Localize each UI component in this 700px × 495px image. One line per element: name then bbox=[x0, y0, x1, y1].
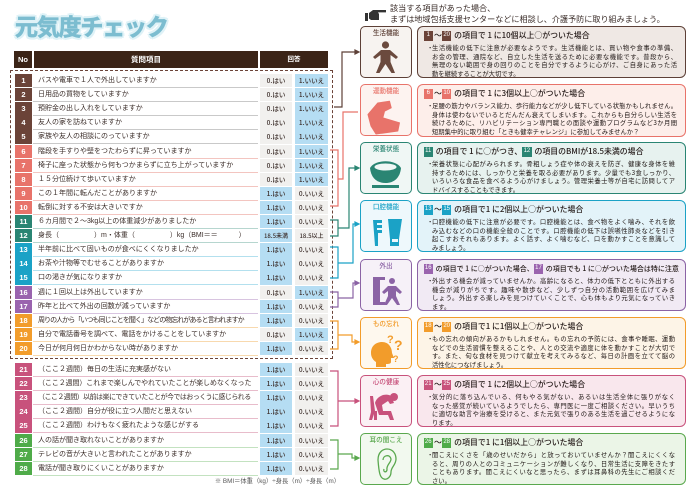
row 9: この１年間に転んだことがありますか bbox=[38, 190, 157, 197]
row 16: 0.はい bbox=[267, 286, 285, 296]
panel: mental health: に適切な助言や治療を受けると、また元気で張りのある生活を過ごせるようにな bbox=[432, 409, 675, 418]
row 22 bbox=[15, 377, 328, 391]
row 7: 0.はい bbox=[267, 160, 285, 170]
panel: hearing: ると、周りの人とのコミュニケーションが難しくなり、日常生活に支障をきたす bbox=[432, 459, 675, 468]
row 27: 0.いいえ bbox=[299, 449, 324, 459]
table header: No: No bbox=[18, 55, 28, 64]
category: motor function bbox=[360, 84, 412, 136]
panel: mental health: ・ bbox=[427, 392, 433, 401]
intro text: まずは地域包括支援センターなどに相談し、介護予防に取り組みましょう。 bbox=[390, 15, 665, 24]
connector: oral function bbox=[330, 222, 359, 278]
row 14: 14 bbox=[19, 259, 28, 268]
panel: motor function: 6 bbox=[427, 90, 430, 96]
row 4: 0.はい bbox=[267, 117, 285, 127]
row 16: 16 bbox=[19, 288, 28, 296]
row 22: 1.はい bbox=[267, 378, 285, 388]
row 8: １５分位続けて歩いていますか bbox=[38, 176, 136, 183]
row 3: 0.はい bbox=[267, 103, 285, 113]
row 8: 8 bbox=[21, 175, 26, 184]
row 26: 1.はい bbox=[267, 434, 285, 444]
row 14: 0.いいえ bbox=[299, 258, 324, 268]
panel: oral function: ・ bbox=[427, 217, 433, 226]
connector: nutrition bbox=[330, 166, 359, 236]
row 17: 昨年と比べて外出の回数が減っていますか bbox=[38, 303, 170, 310]
row 11: ６カ月間で２～3kg以上の体重減少がありましたか bbox=[38, 218, 196, 225]
row 22: （ここ２週間）これまで楽しんでやれていたことが楽しめなくなった bbox=[38, 380, 251, 387]
row 1: 1 bbox=[21, 76, 26, 85]
panel: life function bbox=[417, 26, 686, 78]
row 19: 1.いいえ bbox=[299, 329, 324, 339]
row 2 bbox=[15, 88, 328, 102]
panel: oral function: 起こすおそれもあります。よく話す、よく噛むなど、口を動かすことを意識して bbox=[432, 234, 675, 243]
row 26: 0.いいえ bbox=[299, 434, 324, 444]
category: motor function: 運動機能 bbox=[373, 88, 399, 95]
panel: mental health: ります。 bbox=[432, 418, 457, 426]
row 26: 26 bbox=[19, 436, 28, 444]
panel: life function: 無理のない範囲で身の回りのことを自分でするように心がけ、ご自身にあった活 bbox=[432, 60, 677, 69]
row 21 bbox=[15, 363, 328, 377]
panel: life function: 20 bbox=[443, 32, 450, 38]
panel: hearing: さい。 bbox=[432, 476, 451, 484]
panel: nutrition: ・ bbox=[427, 159, 433, 168]
panel: nutrition: ドバイスすることもできます。 bbox=[432, 184, 519, 194]
row 10: 0.いいえ bbox=[299, 202, 324, 212]
row 19: 0.はい bbox=[267, 329, 285, 339]
panel: life function: 生活機能の低下に注意が必要なようです。生活機能とは、買い物や食事の準備、 bbox=[432, 43, 677, 52]
row 6: 6 bbox=[21, 146, 26, 156]
row 18: 0.いいえ bbox=[299, 315, 324, 325]
row 15: 15 bbox=[19, 273, 28, 282]
row 26 bbox=[15, 434, 328, 448]
row 13: 0.いいえ bbox=[299, 244, 324, 254]
panel: nutrition: の項目で 1 に○がつき、 の項目のBMIが18.5未満の場合 bbox=[436, 146, 643, 157]
dashed frame bbox=[10, 70, 333, 359]
row 6: 階段を手すりや壁をつたわらずに昇っていますか bbox=[38, 148, 192, 154]
row 7: 7 bbox=[21, 161, 26, 170]
category: hearing: 耳の聞こえ bbox=[370, 437, 402, 444]
row 15: 1.はい bbox=[267, 272, 285, 282]
panel: nutrition: 栄養状態に心配がみられます。骨粗しょう症や体の衰えを防ぎ、健康な身体を維 bbox=[432, 159, 675, 168]
row 18 bbox=[15, 314, 328, 328]
row 14: 1.はい bbox=[267, 258, 285, 268]
row 22: 22 bbox=[19, 379, 28, 388]
row 20: 20 bbox=[19, 344, 28, 353]
row 28 bbox=[15, 462, 328, 476]
row 5: 5 bbox=[21, 132, 26, 141]
category: nutrition bbox=[360, 142, 412, 194]
connector: motor function bbox=[330, 112, 358, 206]
row 23: 0.いいえ bbox=[299, 392, 324, 402]
row 14: お茶や汁物等でむせることがありますか bbox=[38, 260, 164, 267]
row 17: 0.いいえ bbox=[299, 301, 324, 311]
row 5: 家族や友人の相談にのっていますか bbox=[38, 133, 150, 140]
row 4 bbox=[15, 116, 328, 130]
row 23: 1.はい bbox=[267, 392, 285, 402]
row 15: 口の渇きが気になりますか bbox=[38, 274, 122, 281]
panel: life function: 1 bbox=[427, 32, 430, 38]
row 9 bbox=[15, 187, 328, 201]
row 22: 0.いいえ bbox=[299, 378, 324, 388]
category: mental health: 心の健康 bbox=[373, 379, 399, 386]
row 6: 0.はい bbox=[267, 146, 285, 156]
row 12: 18.5未満 bbox=[264, 231, 288, 240]
panel: hearing: 28 bbox=[443, 439, 450, 445]
row 25: 25 bbox=[19, 421, 28, 430]
icon: head with question marks bbox=[371, 334, 403, 367]
row 12: 身長（ ）m・体重（ ）kg（BMI＝＝ ） bbox=[38, 232, 246, 239]
panel: motor function: 足腰の筋力やバランス能力、歩行能力などが少し低下している状態かもしれません。 bbox=[432, 101, 677, 110]
row 9: 0.いいえ bbox=[299, 188, 324, 198]
row 3: 預貯金の出し入れをしていますか bbox=[38, 105, 143, 112]
category: oral function: 口腔機能 bbox=[373, 204, 399, 211]
panel: oral function: み込むなどの口の機能全般のことです。口腔機能の低下は誤嚥性肺炎などを引き bbox=[432, 226, 675, 235]
category: life function: 生活機能 bbox=[373, 30, 399, 37]
row 25 bbox=[15, 419, 328, 433]
panel: hearing: こともあります。聞こえにくいなと思ったら、まずは耳鼻科の先生にご相談くだ bbox=[432, 467, 675, 476]
row 12: 12 bbox=[19, 231, 28, 240]
panel: nutrition: 持するためには、しっかりと栄養を取る必要があります。少量でも3食しっかり、 bbox=[432, 168, 675, 177]
panel: motor function: 短期集中的に取り組む「ときも健幸チャレンジ」に参加してみませんか？ bbox=[432, 126, 639, 136]
panel: mental health: ～ の項目で 1 に2個以上○がついた場合 bbox=[434, 379, 585, 390]
row 11: 0.いいえ bbox=[299, 216, 324, 226]
row 8: 1.いいえ bbox=[299, 174, 324, 184]
panel: going out: 16 bbox=[425, 265, 432, 271]
row 4: 4 bbox=[21, 118, 26, 127]
row 23: 23 bbox=[19, 393, 28, 402]
category: life function bbox=[360, 26, 412, 78]
category: forgetfulness bbox=[360, 317, 412, 369]
row 24: 1.はい bbox=[267, 406, 285, 416]
row 16: 1.いいえ bbox=[299, 286, 324, 296]
row 3: 3 bbox=[21, 104, 26, 113]
panel: hearing: 聞こえにくさを「歳のせいだから」と放っておいていませんか？聞こえにくくな bbox=[432, 450, 675, 459]
panel: nutrition bbox=[417, 142, 686, 194]
panel: hearing: 26 bbox=[425, 439, 432, 445]
icon: person leaving door bbox=[373, 277, 402, 305]
panel: nutrition: 12 bbox=[524, 148, 530, 154]
row 5: 0.はい bbox=[267, 131, 285, 141]
panel: forgetfulness: す。また、旬な食材を見つけて献立を考えてみるなど、毎日の計画を立てて脳の bbox=[432, 351, 675, 360]
row 25: 0.いいえ bbox=[299, 420, 324, 430]
panel: nutrition: いろいろな食品を食べるよう心がけましょう。管理栄養士等が自宅に訪問してア bbox=[432, 176, 675, 185]
row 21: 21 bbox=[19, 365, 28, 374]
icon: walking person bbox=[373, 41, 398, 73]
panel: forgetfulness bbox=[417, 317, 686, 369]
row 9: 1.はい bbox=[267, 188, 285, 198]
row 4: 友人の家を訪ねていますか bbox=[38, 119, 122, 126]
panel: forgetfulness: ・ bbox=[427, 334, 433, 343]
row 2: 日用品の買物をしていますか bbox=[38, 91, 129, 98]
row 6: 1.いいえ bbox=[299, 146, 324, 156]
row 17 bbox=[15, 300, 328, 314]
panel: forgetfulness: 20 bbox=[443, 323, 450, 329]
panel: motor function: ・ bbox=[427, 101, 433, 110]
panel: oral function: 13 bbox=[425, 206, 432, 212]
BMI footnote: ※ BMI＝体重（kg）÷身長（m）÷身長（m） bbox=[215, 478, 340, 485]
panel: oral function: 15 bbox=[443, 206, 450, 212]
icon: ear bbox=[377, 448, 397, 480]
panel: motor function: 10 bbox=[443, 90, 450, 96]
row 9: 9 bbox=[21, 189, 26, 198]
row 1: バスや電車で１人で外出していますか bbox=[38, 77, 157, 84]
row 13: 13 bbox=[19, 245, 28, 254]
row 14 bbox=[15, 257, 328, 271]
row 27 bbox=[15, 448, 328, 462]
panel: going out: 外出する機会が減っていませんか。高齢になると、体力の低下とともに外出する bbox=[432, 276, 675, 285]
row 6 bbox=[15, 145, 328, 159]
panel: life function: 動を継続することが大切です。 bbox=[432, 68, 520, 78]
row 11 bbox=[15, 215, 328, 229]
panel: forgetfulness: 活性化につなげましょう。 bbox=[432, 360, 507, 368]
row 13: 半年前に比べて固いものが食べにくくなりましたか bbox=[38, 246, 199, 253]
panel: mental health: なった感覚が続いているようでしたら、専門医に一度ご相談ください。早いうち bbox=[432, 401, 675, 410]
row 18: 周りの人から「いつも同じことを聞く」などの物忘れがあると言われますか bbox=[38, 317, 244, 324]
table header: answer bbox=[260, 51, 328, 68]
icon: head with question marks: ? bbox=[394, 337, 403, 353]
category: oral function bbox=[360, 200, 412, 252]
row 15: 0.いいえ bbox=[299, 272, 324, 282]
row 5 bbox=[15, 130, 328, 144]
row 23 bbox=[15, 391, 328, 405]
table header: question: 質問項目 bbox=[131, 55, 161, 64]
row 1 bbox=[15, 74, 328, 88]
row 10: 転倒に対する不安は大きいですか bbox=[38, 204, 143, 211]
row 20: 今日が何月何日かわからない時がありますか bbox=[38, 345, 178, 352]
row 27: 27 bbox=[19, 450, 28, 459]
title: 元気度チェック bbox=[15, 8, 168, 42]
row 21: 1.はい bbox=[267, 364, 285, 374]
row 15 bbox=[15, 271, 328, 285]
row 10: 1.はい bbox=[267, 202, 285, 212]
panel: going out: しょう。外出する楽しみを見つけていくことで、心も体もより元気になっていき bbox=[432, 293, 675, 302]
panel: going out: 17 bbox=[535, 265, 542, 271]
intro text: 該当する項目があった場合、 bbox=[390, 4, 495, 13]
row 12 bbox=[15, 229, 328, 243]
row 28: 0.いいえ bbox=[299, 463, 324, 473]
panel: going out: ・ bbox=[427, 276, 433, 285]
icon: rice bowl bbox=[370, 161, 401, 188]
row 10 bbox=[15, 201, 328, 215]
row 25: （ここ２週間）わけもなく疲れたような感じがする bbox=[38, 422, 199, 429]
row 3 bbox=[15, 102, 328, 116]
intro text bbox=[390, 4, 665, 24]
row 8: 0.はい bbox=[267, 174, 285, 184]
row 12: 18.5以上 bbox=[299, 231, 324, 240]
row 24: （ここ２週間）自分が役に立つ人間だと思えない bbox=[38, 408, 192, 415]
panel: mental health: 気分的に落ち込んでいる、何もやる気がない、あるいは生活全体に張りがなく bbox=[432, 392, 675, 401]
row 26: 人の話が聞き取れないことがありますか bbox=[38, 436, 164, 444]
row 28: 1.はい bbox=[267, 463, 285, 473]
panel: motor function: ～ の項目で 1 に3個以上○がついた場合 bbox=[434, 88, 585, 99]
panel: life function: ～ の項目で 1 に10個以上○がついた場合 bbox=[434, 30, 590, 41]
row 28: 電話が聞き取りにくいことがありますか bbox=[38, 465, 164, 472]
row 16: 週に１回以上は外出していますか bbox=[38, 288, 143, 296]
row 2: 2 bbox=[21, 90, 26, 99]
row 7: 1.いいえ bbox=[299, 160, 324, 170]
row 1: 1.いいえ bbox=[299, 75, 324, 85]
panel: going out: の項目で 1 に○がついた場合、 の項目でも 1 に○がついた場合は特に注意 bbox=[436, 264, 679, 274]
row 10: 10 bbox=[19, 203, 28, 212]
row 16 bbox=[15, 286, 328, 300]
row 19: 自分で電話番号を調べて、電話をかけることをしていますか bbox=[38, 331, 226, 338]
panel: mental health: 21 bbox=[425, 381, 432, 387]
row 19: 19 bbox=[19, 330, 28, 339]
icon: head with question marks: ? bbox=[387, 334, 394, 346]
row 20 bbox=[15, 342, 328, 356]
panel: motor function bbox=[417, 84, 686, 137]
row 7 bbox=[15, 159, 328, 173]
panel: life function: お金の管理、通院など、自立した生活を送るために必要な機能です。普段から、 bbox=[432, 52, 677, 61]
connector: forgetfulness bbox=[330, 321, 359, 349]
panel: forgetfulness: ～ の項目で1 に1個以上○がついた場合 bbox=[434, 321, 583, 332]
connector: mental health bbox=[330, 371, 359, 426]
panel: hearing: ・ bbox=[427, 450, 433, 459]
connector: hearing bbox=[330, 440, 359, 469]
panel: oral function: みましょう。 bbox=[432, 242, 469, 252]
row 25: 1.はい bbox=[267, 420, 285, 430]
row 4: 1.いいえ bbox=[299, 117, 324, 127]
row 28: 28 bbox=[19, 464, 28, 473]
panel: going out bbox=[417, 259, 686, 311]
panel: life function: ・ bbox=[427, 43, 433, 52]
panel: forgetfulness: もの忘れの傾向があるかもしれません。もの忘れの予防には、食事や睡眠、運動 bbox=[432, 334, 675, 343]
row 13 bbox=[15, 243, 328, 257]
panel: going out: 機会が減りがちです。趣味や散歩など、少しずつ自分の活動範囲を広げてみま bbox=[432, 285, 675, 294]
row 21: （ここ２週間）毎日の生活に充実感がない bbox=[38, 366, 171, 373]
icon: toothbrush and toothpaste bbox=[373, 219, 402, 246]
table header: answer: 回答 bbox=[288, 56, 300, 63]
row 1: 0.はい bbox=[267, 75, 285, 85]
row 17: 1.はい bbox=[267, 301, 285, 311]
panel: oral function: ～ の項目で1 に2個以上○がついた場合 bbox=[434, 204, 583, 215]
row 11: 1.はい bbox=[267, 216, 285, 226]
panel: mental health bbox=[417, 375, 686, 427]
panel: oral function: 口腔機能の低下に注意が必要です。口腔機能とは、食べ物をよく噛み、それを飲 bbox=[432, 217, 675, 226]
row 20: 0.いいえ bbox=[299, 343, 324, 353]
panel: hearing bbox=[417, 433, 686, 485]
row 23: （ここ２週間）以前は楽にできていたことが今ではおっくうに感じられる bbox=[38, 394, 251, 401]
row 18: 1.はい bbox=[267, 315, 285, 325]
row 19 bbox=[15, 328, 328, 342]
panel: going out: ます。 bbox=[432, 302, 450, 310]
category: forgetfulness: もの忘れ bbox=[373, 321, 399, 328]
row 2: 0.はい bbox=[267, 89, 285, 99]
connector: going out bbox=[330, 281, 359, 307]
icon: head with question marks: ? bbox=[393, 354, 398, 364]
panel: motor function: 身体は使わないでいるとだんだん衰えてしまいます。これからも自分らしい生活を bbox=[432, 110, 677, 119]
connector: life function bbox=[334, 50, 359, 107]
row 24: 0.いいえ bbox=[299, 406, 324, 416]
category: nutrition: 栄養状態 bbox=[373, 146, 399, 153]
panel: motor function: 続けるために、リハビリテーション専門職との面談や運動プログラムなど3か月間 bbox=[432, 118, 677, 127]
row 17: 17 bbox=[19, 302, 28, 311]
row 27: テレビの音が大きいと言われたことがありますか bbox=[38, 451, 192, 458]
row 20: 1.はい bbox=[267, 343, 285, 353]
category: going out bbox=[360, 259, 412, 311]
table header: question bbox=[34, 51, 258, 68]
row 24: 24 bbox=[19, 407, 28, 416]
panel: forgetfulness: 18 bbox=[425, 323, 432, 329]
row 3: 1.いいえ bbox=[299, 103, 324, 113]
row 18: 18 bbox=[19, 316, 28, 325]
row 21: 0.いいえ bbox=[299, 364, 324, 374]
category: mental health bbox=[360, 375, 412, 427]
row 11: 11 bbox=[20, 217, 27, 226]
table header: No bbox=[14, 51, 32, 68]
row 8 bbox=[15, 173, 328, 187]
row 2: 1.いいえ bbox=[299, 89, 324, 99]
row 13: 1.はい bbox=[267, 244, 285, 254]
category: going out: 外出 bbox=[379, 263, 393, 270]
panel: forgetfulness: などでの生活習慣を整えることや、人との交流や適度に体を動かすことが大切で bbox=[432, 343, 675, 352]
icon: pointing hand bbox=[365, 10, 386, 21]
panel: hearing: ～ の項目で1 に1個以上○がついた場合 bbox=[434, 437, 583, 448]
icon: flexed arm bbox=[368, 100, 400, 134]
row 5: 1.いいえ bbox=[299, 131, 324, 141]
row 24 bbox=[15, 405, 328, 419]
panel: nutrition: 11 bbox=[425, 148, 431, 154]
row 27: 1.はい bbox=[267, 449, 285, 459]
panel: mental health: 25 bbox=[443, 381, 450, 387]
panel: oral function bbox=[417, 200, 686, 252]
row 7: 椅子に座った状態から何もつかまらずに立ち上がっていますか bbox=[38, 162, 233, 169]
icon: slumped seated person bbox=[369, 393, 398, 420]
category: hearing bbox=[360, 433, 412, 485]
